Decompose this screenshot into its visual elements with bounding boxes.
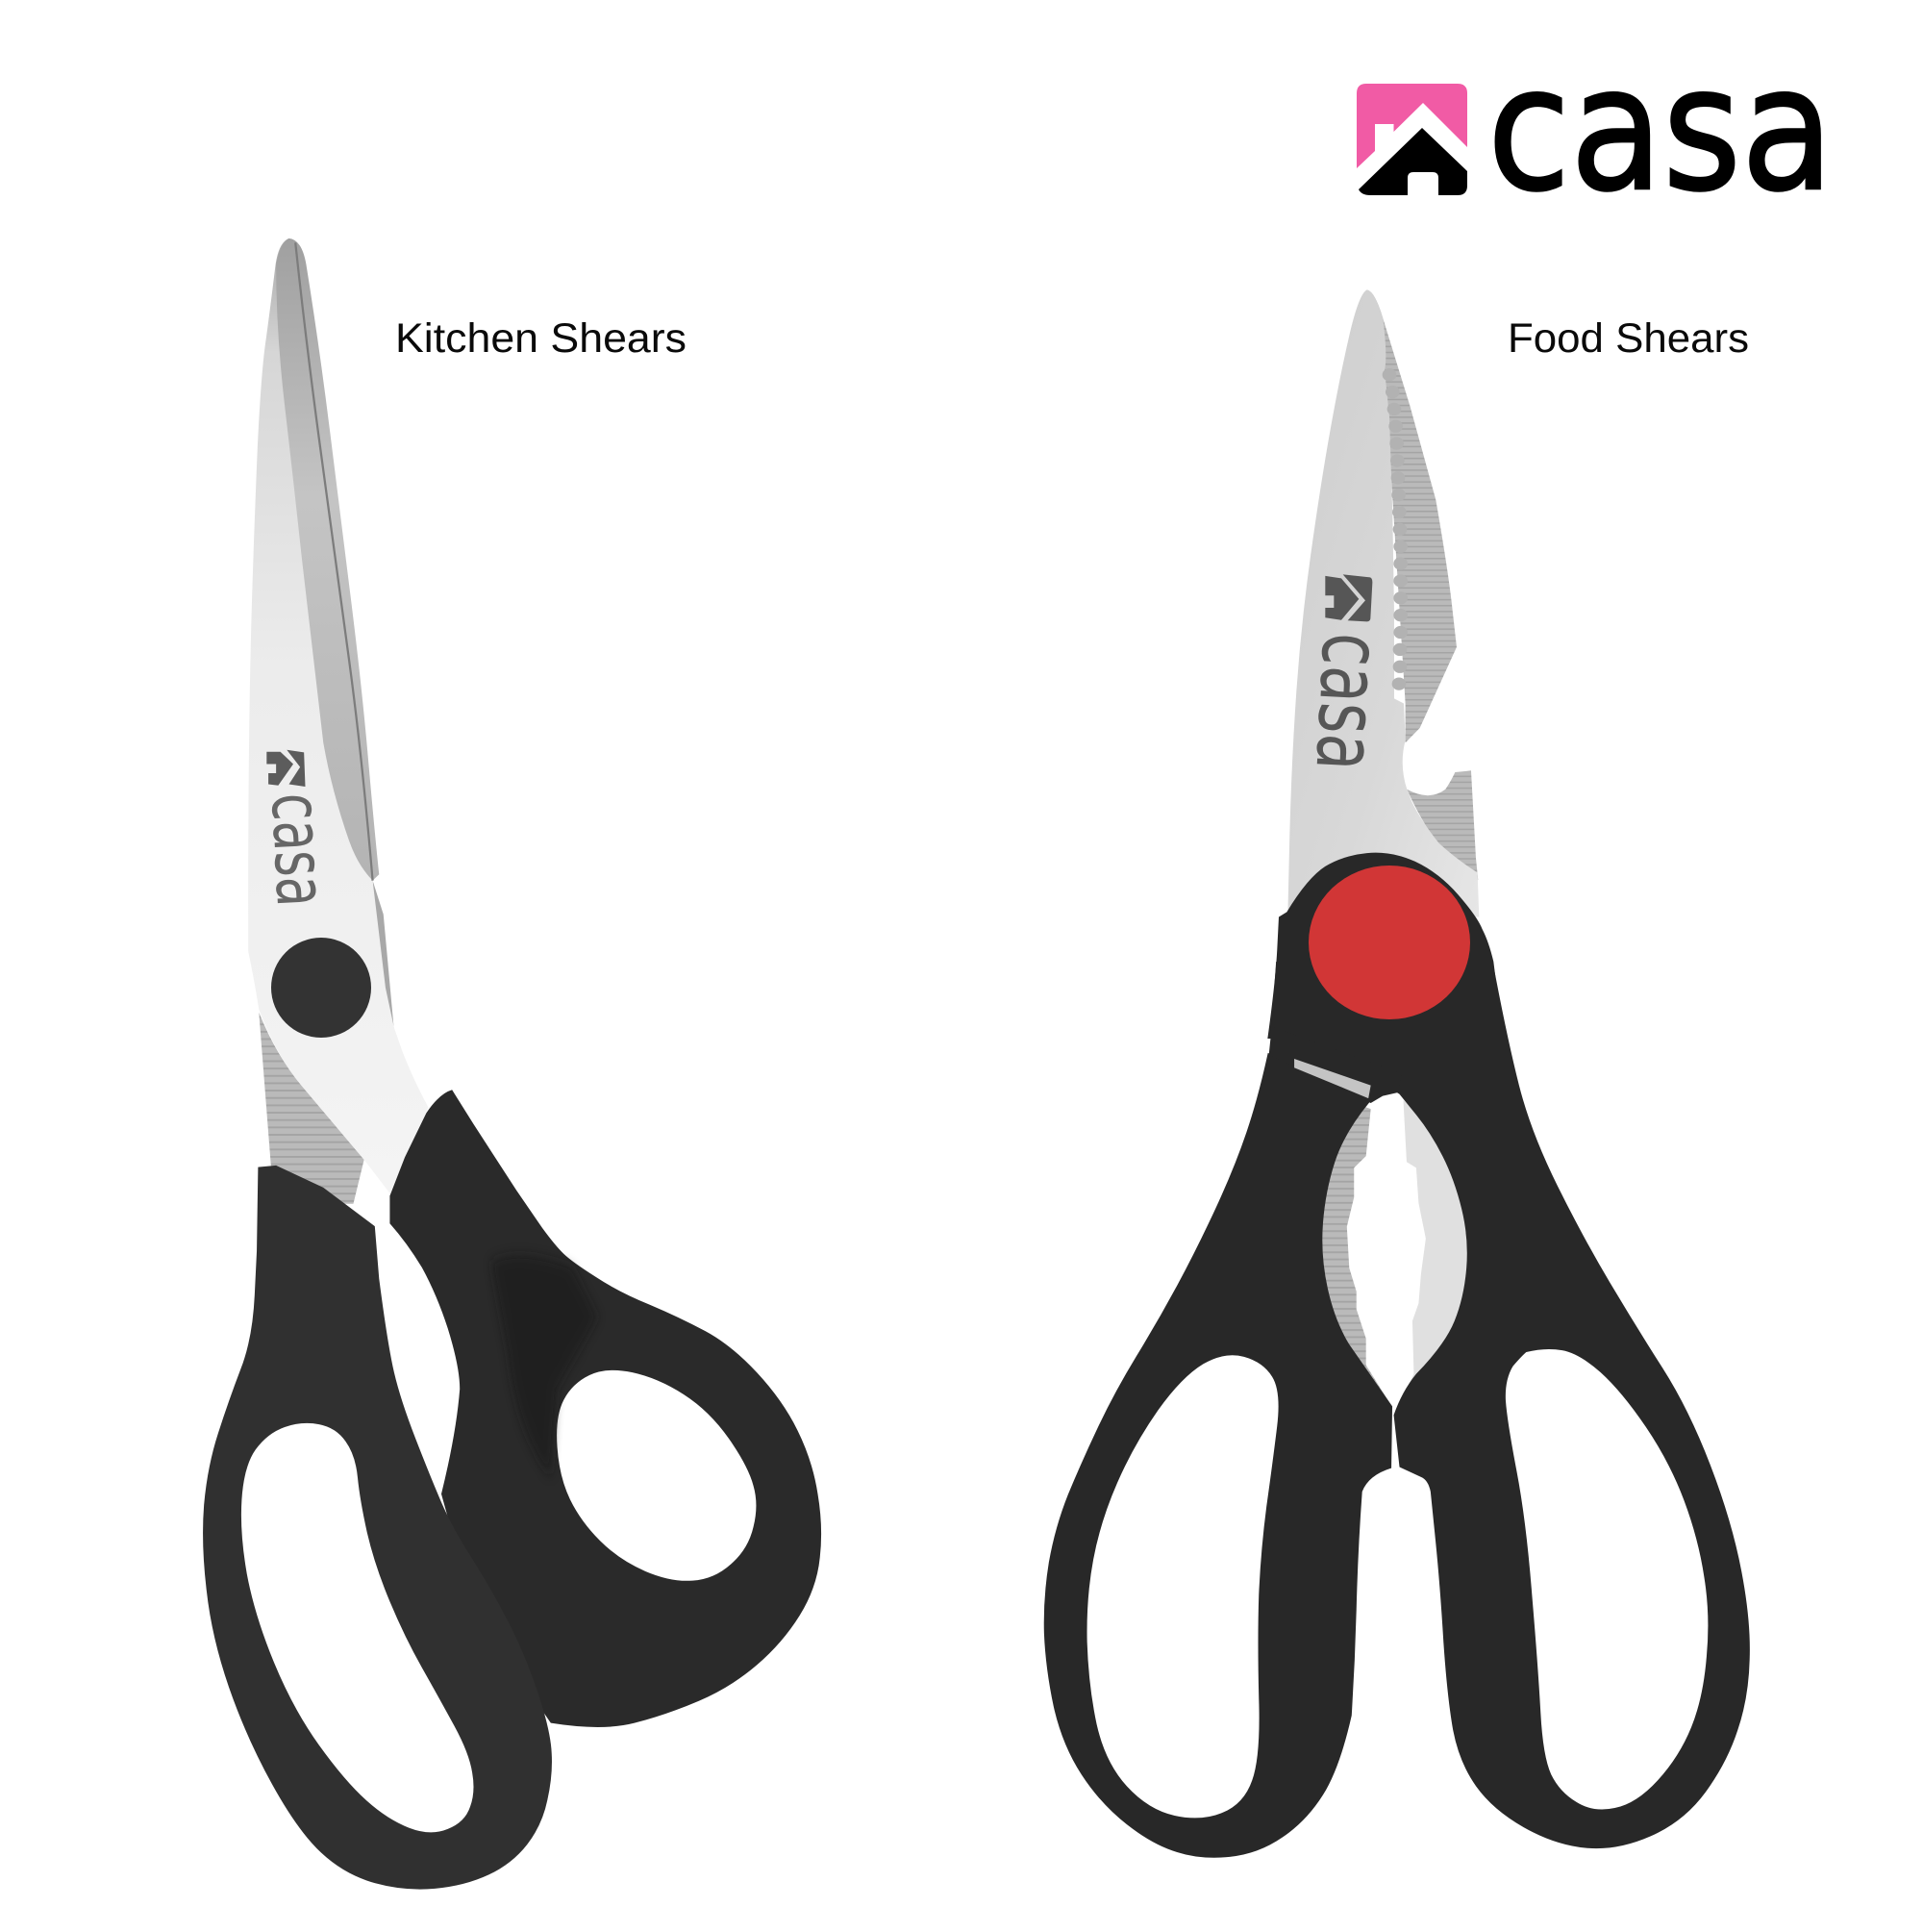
- blade engraved casa text: casa: [256, 790, 342, 909]
- blade engraved casa text: casa: [1297, 631, 1400, 773]
- logo wordmark: casa: [1487, 30, 1834, 229]
- food shears left handle: [1044, 1053, 1392, 1858]
- food shears right handle: [1269, 962, 1750, 1848]
- kitchen shears right handle: [389, 1090, 821, 1727]
- blade engraved logo icon: [1325, 574, 1372, 621]
- brand logo: casa: [1357, 30, 1834, 229]
- kitchen shears left handle: [203, 1166, 552, 1890]
- blade engraved logo icon: [266, 750, 305, 787]
- food shears head: [1267, 853, 1503, 1039]
- kitchen shears blades: [248, 238, 429, 1204]
- product: food shears: [1044, 289, 1750, 1858]
- logo icon: pink square with house roof: [1357, 84, 1467, 195]
- food shears red pivot button: [1309, 866, 1470, 1019]
- label: Food Shears: Food Shears: [1508, 315, 1749, 362]
- product: kitchen shears: [203, 238, 821, 1890]
- label: Kitchen Shears: Kitchen Shears: [395, 315, 687, 362]
- blade serration: [1383, 368, 1408, 690]
- food shears upper blade: [1287, 289, 1479, 916]
- food shears handle joint with steel sliver: [1269, 1026, 1402, 1103]
- kitchen shears pivot screw: [271, 938, 371, 1038]
- food shears inner serrated blades: [1311, 1100, 1479, 1409]
